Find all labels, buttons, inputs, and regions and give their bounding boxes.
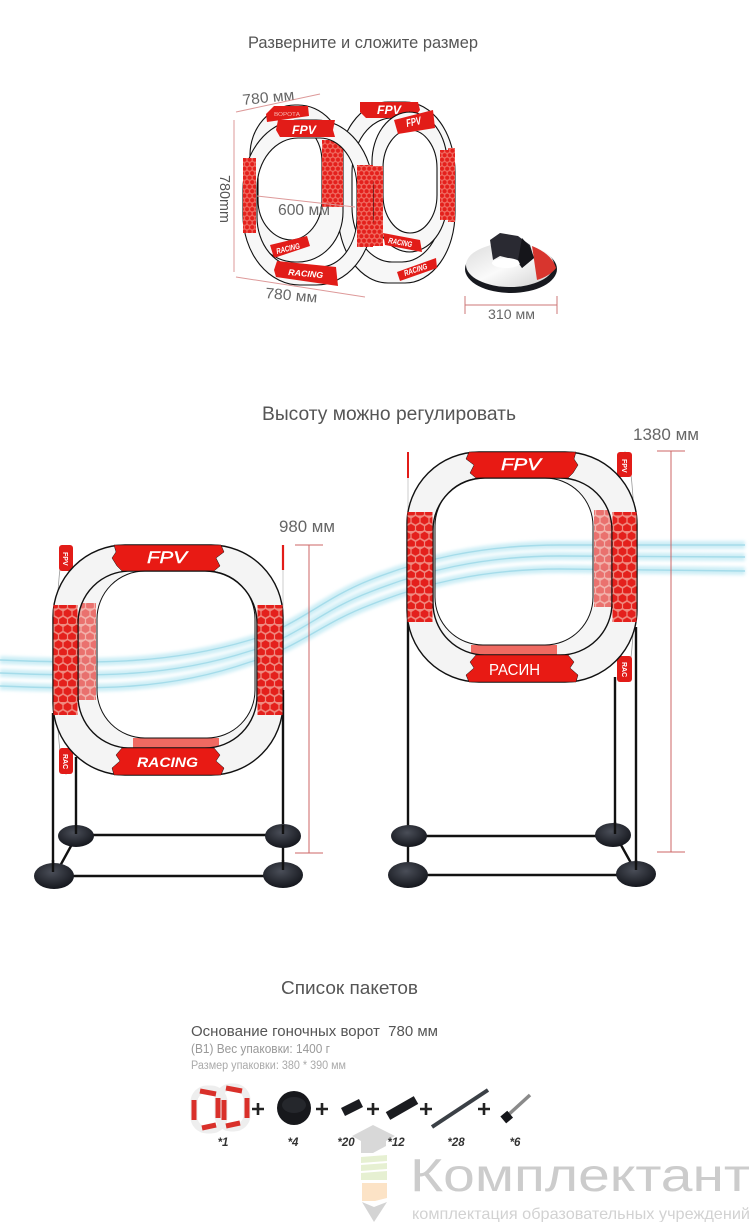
gate: back left ring: RACING (275, 241, 301, 256)
side gate edge-on (56, 545, 283, 774)
package contents row (194, 1087, 530, 1149)
icon: orange box (362, 1183, 387, 1201)
gate: front left ring: RACING (288, 267, 324, 280)
dimension: top 780 mm: 780 мм (242, 87, 295, 109)
quantity labels: *1 (218, 1137, 228, 1149)
stand: rods and bases (34, 690, 303, 889)
gate: front left ring: FPV (292, 123, 317, 137)
gate: back left ring: ВОРОТА (274, 112, 301, 118)
gate assembly: 1380 mm (388, 452, 656, 888)
gate: front right ring: RACING (388, 236, 413, 249)
label: FPV: FPV (501, 456, 543, 474)
icon: base disc (277, 1091, 311, 1125)
gate: rear right ring: FPV (377, 103, 402, 117)
gate assembly: 980 mm (34, 545, 303, 889)
quantity labels: *12 (387, 1137, 405, 1149)
package size: Размер упаковки: 380 * 390 мм (191, 1060, 346, 1072)
package weight: (B1) Вес упаковки: 1400 г (191, 1042, 330, 1056)
dimension: bottom 780 mm: 780 мм (265, 285, 318, 307)
dimension: left 780 mm: 780mm (216, 175, 232, 223)
dimension: bottom 780 mm (236, 277, 365, 307)
dimension: bag 310 mm: 310 мм (488, 307, 535, 322)
gate ring (53, 545, 283, 775)
dimension: top 780 mm (236, 87, 320, 112)
quantity labels: *20 (337, 1137, 355, 1149)
package title: Основание гоночных ворот 780 мм (191, 1024, 438, 1040)
diagram: folding gates with dimensions (216, 87, 557, 322)
gate: front right ring (372, 110, 448, 252)
dimension: inner 600 mm (257, 196, 355, 219)
stand: rods and bases (388, 615, 656, 888)
brand name: Комплектант (410, 1149, 750, 1201)
dimension: 980 mm (279, 517, 335, 853)
side gate edge-on: FPV (620, 459, 627, 473)
quantity labels (218, 1137, 521, 1149)
icon: folded gate bag (465, 233, 557, 293)
icon: connector (500, 1095, 530, 1123)
heading: fold size: Разверните и сложите размер (248, 33, 478, 52)
dimension: bag 310 mm (465, 296, 557, 322)
gate ring (407, 452, 637, 682)
gate: back left ring (250, 105, 343, 262)
gate: rear right ring (338, 102, 455, 283)
dimension: inner 600 mm: 600 мм (278, 202, 330, 219)
plus signs (252, 1103, 490, 1115)
icon: green books (361, 1155, 387, 1180)
icon: medium tube (388, 1100, 416, 1116)
package description (191, 1024, 438, 1072)
gate: rear right ring: RACING (403, 262, 428, 278)
label: FPV: FPV (147, 549, 189, 567)
side gate edge-on (408, 452, 635, 682)
icon: two gates (194, 1087, 247, 1130)
side gate edge-on: RAC (61, 754, 68, 769)
dimension: 980 mm: 980 мм (279, 517, 335, 536)
label: РАСИН: РАСИН (489, 662, 540, 679)
icon: long rod (432, 1090, 488, 1127)
icon: short tube (343, 1103, 361, 1112)
dimension: 1380 mm (633, 425, 699, 852)
decoration: blue flowing lines (0, 545, 745, 688)
heading: adjustable height: Высоту можно регулировать (262, 403, 516, 425)
gate: front right ring: FPV (405, 115, 423, 130)
icon: down arrow (362, 1202, 387, 1222)
dimension: 1380 mm: 1380 мм (633, 425, 699, 444)
side gate edge-on: RAC (620, 662, 627, 677)
side gate edge-on: FPV (61, 552, 68, 566)
heading: package list: Список пакетов (281, 978, 418, 998)
quantity labels: *4 (288, 1137, 299, 1149)
quantity labels: *6 (510, 1137, 521, 1149)
gate: front left ring (243, 120, 373, 286)
watermark logo (352, 1125, 750, 1222)
icon: graduation cap (352, 1125, 395, 1153)
quantity labels: *28 (447, 1137, 465, 1149)
label: RACING: RACING (137, 754, 198, 770)
